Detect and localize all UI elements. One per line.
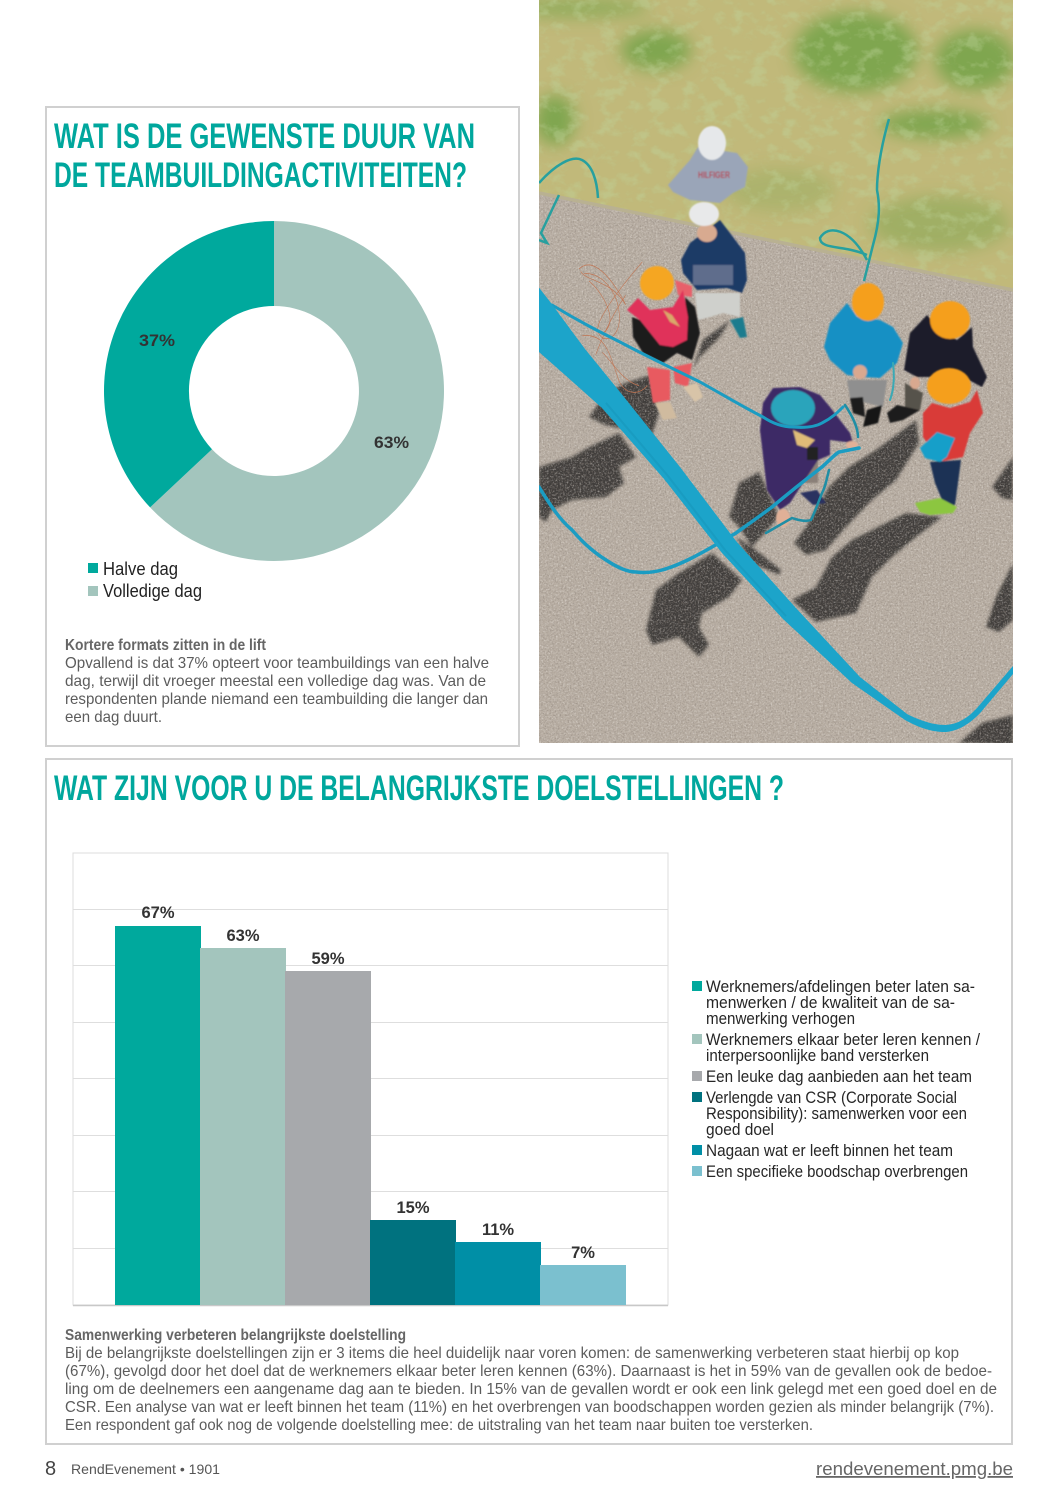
footer [45, 1458, 1013, 1480]
thin blue ropes [539, 305, 894, 572]
text block: kortere formats: respondenten plande niemand een teambuilding die langer dan [65, 691, 488, 708]
photo: team with helmets and ropes seen from above [510, 0, 1015, 745]
bar values: 67% [141, 904, 175, 922]
website link: rendevenement.pmg.be [816, 1459, 1013, 1479]
legend: bar chart: Een leuke dag aanbieden aan het team [706, 1068, 972, 1086]
heading: doelstellingen: WAT ZIJN VOOR U DE BELANGRIJKSTE DOELSTELLINGEN ? [54, 769, 784, 808]
legend: bar chart: Een specifieke boodschap overbrengen [706, 1163, 968, 1181]
grass [510, 0, 1015, 290]
legend: bar chart: interpersoonlijke band versterken [706, 1047, 929, 1065]
text block: kortere formats [65, 637, 489, 726]
orange rope pile [579, 262, 647, 392]
donut chart [104, 221, 444, 561]
bar: 11% [455, 1242, 541, 1305]
text block: kortere formats: Opvallend is dat 37% opteert voor teambuildings van een halve [65, 655, 489, 672]
legend: bar chart: Responsibility): samenwerken voor een [706, 1105, 967, 1123]
bar: 15% [370, 1220, 456, 1305]
text block: samenwerking verbeteren: Bij de belangrijkste doelstellingen zijn er 3 items die heel duidelijk naar voren komen: de samenwerking verbeteren staat hierbij op kop [65, 1345, 959, 1362]
legend: donut: Halve dag [103, 559, 178, 579]
bar: 63% [200, 948, 286, 1305]
bar values: 63% [226, 927, 260, 945]
bar: 7% [540, 1265, 626, 1305]
person: red vest, pink trousers [627, 266, 703, 420]
thick blue rope [513, 285, 1013, 732]
person: grey hoodie: HILFIGER [698, 170, 730, 180]
person: blue jacket [824, 283, 903, 427]
legend: bar chart: Verlengde van CSR (Corporate Social [706, 1089, 957, 1107]
bar values: 15% [396, 1199, 430, 1217]
person: black jacket [887, 301, 987, 423]
bar values [141, 904, 595, 1262]
heading: gewenste duur [54, 117, 475, 195]
value: 63%: 63% [374, 434, 409, 452]
bar chart [73, 853, 668, 1306]
person: red vest, green shoes [915, 368, 983, 515]
teal ropes on grass [539, 119, 889, 281]
bar: 67% [115, 926, 201, 1305]
legend: donut [88, 559, 202, 601]
legend: bar chart: menwerken / de kwaliteit van de sa- [706, 994, 955, 1012]
person: navy jacket [681, 202, 747, 338]
panel: gewenste duur [46, 107, 519, 746]
person: purple jacket bending [760, 387, 858, 527]
publication name: RendEvenement • 1901 [71, 1461, 220, 1477]
legend: bar chart: Werknemers elkaar beter leren kennen / [706, 1031, 980, 1049]
legend: bar chart: Nagaan wat er leeft binnen het team [706, 1142, 953, 1160]
heading: gewenste duur: DE TEAMBUILDINGACTIVITEITEN? [54, 156, 467, 195]
heading: gewenste duur: WAT IS DE GEWENSTE DUUR VAN [54, 117, 475, 156]
stone edge [539, 193, 1013, 290]
legend: bar chart: Werknemers/afdelingen beter laten sa- [706, 978, 975, 996]
text block: kortere formats: een dag duurt. [65, 709, 162, 726]
legend: bar chart [692, 978, 980, 1181]
shadows on gravel [539, 320, 1013, 745]
segment: volledige dag 63% [150, 221, 444, 561]
text block: samenwerking verbeteren: CSR. Een analyse van wat er leeft binnen het team (11%) en het overbrengen van boodschappen worden gezien als minder belangrijk (7%). [65, 1399, 994, 1416]
page number: 8 [45, 1458, 56, 1480]
text block: kortere formats: dag, terwijl dit vroeger meestal een volledige dag was. Van de [65, 673, 486, 690]
bar values: 59% [311, 950, 345, 968]
text block: samenwerking verbeteren: Een respondent gaf ook nog de volgende doelstelling mee: de uitstraling van het team naar buiten toe versterken. [65, 1417, 813, 1434]
legend: bar chart: goed doel [706, 1121, 774, 1139]
panel: belangrijkste doelstellingen [46, 759, 1012, 1444]
value: 37%: 37% [139, 332, 175, 350]
bar values: 11% [482, 1221, 514, 1239]
legend: donut: Volledige dag [103, 581, 202, 601]
legend: bar chart: menwerking verhogen [706, 1010, 855, 1028]
text block: samenwerking verbeteren: (67%), gevolgd door het doel dat de werknemers elkaar beter leren kennen (63%). Daarnaast is het in 59% van de gevallen ook de bedoe- [65, 1363, 992, 1380]
bar values: 7% [571, 1244, 595, 1262]
bar: 59% [285, 971, 371, 1305]
text block: samenwerking verbeteren: ling om de deelnemers een aangename dag aan te bieden. In 15% van de gevallen wordt er ook een link gelegd met een goed doel en de [65, 1381, 997, 1398]
text block: samenwerking verbeteren [65, 1327, 997, 1434]
text block: samenwerking verbeteren: Samenwerking verbeteren belangrijkste doelstelling [65, 1327, 406, 1344]
text block: kortere formats: Kortere formats zitten in de lift [65, 637, 266, 654]
person: grey hoodie [668, 126, 748, 203]
segment: halve dag 37% [104, 221, 274, 507]
rope shade stripe [606, 403, 786, 616]
